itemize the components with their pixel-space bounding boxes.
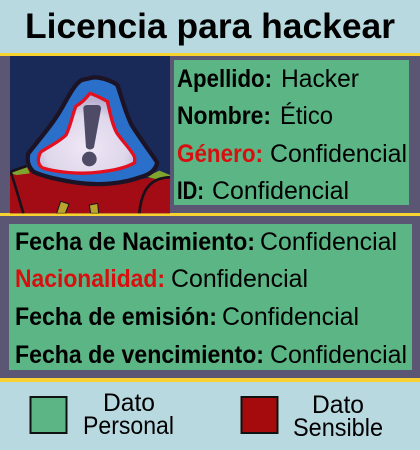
name [177,101,333,130]
id: Confidencial [212,177,349,205]
title: Licencia para hackear [25,7,395,46]
legend: personal data: Personal [83,412,174,440]
expiry date [15,341,407,369]
portrait: hooded figure with warning sign [10,56,170,213]
gender [177,140,407,168]
birth date [15,228,397,256]
gender: Género: [177,140,263,168]
panel: dates and nationality [9,224,412,370]
name: Ético [280,101,333,130]
legend: sensitive data: Sensible [293,414,383,442]
gender: Confidencial [270,140,407,168]
nationality: Nacionalidad: [15,265,165,293]
birth date: Confidencial [260,228,397,256]
header band [0,0,420,54]
issue date [15,303,359,331]
nationality [15,265,308,293]
legend: sensitive data: Dato [312,391,364,419]
legend: personal data [30,389,174,440]
surname: Apellido: [177,65,272,93]
card body background [0,53,420,381]
panel: personal data [174,60,409,205]
expiry date: Fecha de vencimiento: [15,341,264,369]
surname: Hacker [281,65,359,93]
issue date: Fecha de emisión: [15,303,217,331]
legend: personal data: Dato [103,389,155,417]
name: Nombre: [177,102,271,130]
surname [177,65,359,93]
id: ID: [177,177,204,205]
nationality: Confidencial [171,265,308,293]
expiry date: Confidencial [270,341,407,369]
legend: sensitive data [242,391,383,442]
birth date: Fecha de Nacimiento: [15,228,255,256]
issue date: Confidencial [222,303,359,331]
